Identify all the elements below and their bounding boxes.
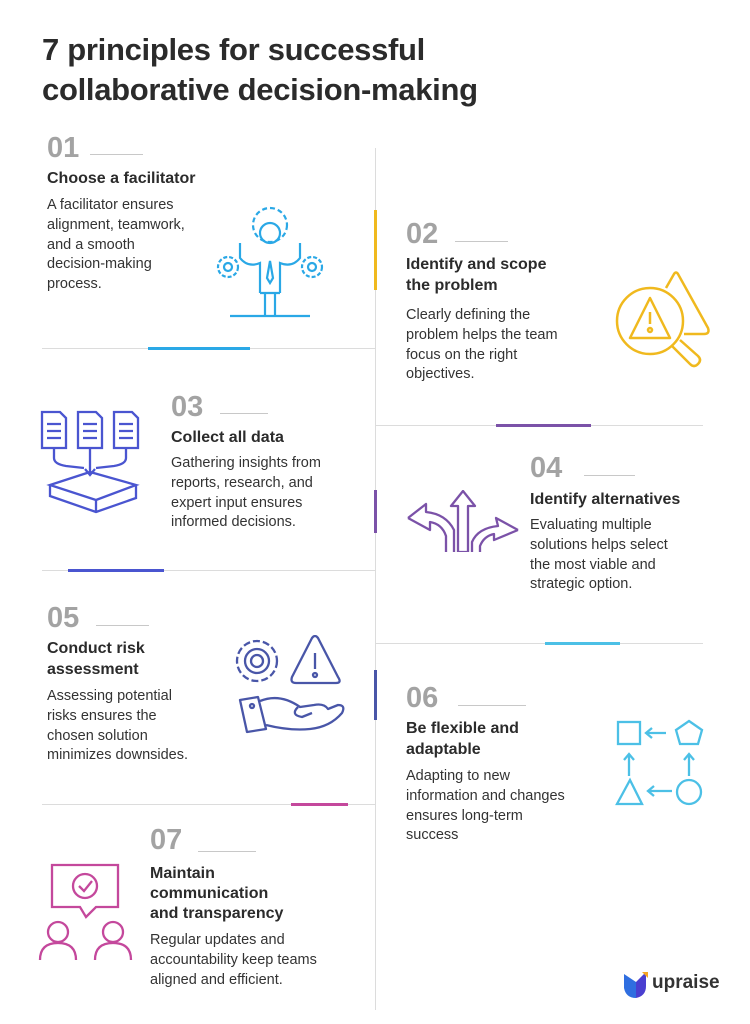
body 05: minimizes downsides. [47, 747, 188, 763]
body 01: A facilitator ensures [47, 197, 174, 213]
heading 07: Maintain [150, 865, 215, 882]
body 03 [171, 455, 321, 530]
heading 05: Conduct risk [47, 640, 145, 657]
heading 07 [150, 865, 284, 922]
body 06: success [406, 827, 458, 843]
heading 01: Choose a facilitator [47, 170, 195, 187]
panel: 02 [406, 218, 558, 382]
panel: 06 [406, 682, 565, 843]
title: 7 principles for successful [42, 32, 425, 67]
heading 03: Collect all data [171, 429, 284, 446]
body 03: expert input ensures [171, 495, 302, 511]
body 04: strategic option. [530, 576, 632, 592]
body 03: Gathering insights from [171, 455, 321, 471]
panel: 07 [150, 824, 317, 988]
heading 06: Be flexible and [406, 720, 519, 737]
heading 05 [47, 640, 145, 678]
logo: upraise: upraise [652, 972, 720, 993]
body 07: Regular updates and [150, 932, 285, 948]
body 04: solutions helps select [530, 537, 668, 553]
body 01: and a smooth [47, 237, 135, 253]
number 01: 01 [47, 132, 79, 164]
number 04: 04 [530, 452, 562, 484]
body 07: aligned and efficient. [150, 972, 283, 988]
body 02: Clearly defining the [406, 307, 530, 323]
body 06: information and changes [406, 788, 565, 804]
body 05: risks ensures the [47, 708, 157, 724]
icon: people with chat check [38, 864, 132, 960]
body 01: process. [47, 276, 102, 292]
icon: warning magnifier [616, 271, 710, 368]
heading 05: assessment [47, 661, 139, 678]
body 03: reports, research, and [171, 475, 313, 491]
icon: documents to box [40, 410, 140, 514]
body 04: Evaluating multiple [530, 517, 652, 533]
number 06: 06 [406, 682, 438, 714]
heading 06: adaptable [406, 741, 481, 758]
body 07: accountability keep teams [150, 952, 317, 968]
body 01 [47, 197, 185, 292]
icon: shapes cycle [615, 720, 704, 806]
icon: facilitator with gears [216, 206, 324, 318]
number 07: 07 [150, 824, 182, 856]
number 05: 05 [47, 602, 79, 634]
body 02: objectives. [406, 366, 475, 382]
body 05: chosen solution [47, 728, 148, 744]
heading 06 [406, 720, 519, 758]
number 02: 02 [406, 218, 438, 250]
panel: 04 [530, 452, 680, 592]
panel: 01 [47, 132, 196, 292]
body 04: the most viable and [530, 557, 656, 573]
icon: diverging arrows [407, 490, 518, 552]
body 01: decision-making [47, 256, 152, 272]
body 06 [406, 768, 565, 843]
heading 02: Identify and scope [406, 256, 546, 273]
body 06: Adapting to new [406, 768, 510, 784]
body 07 [150, 932, 317, 988]
title: collaborative decision-making [42, 72, 478, 107]
icon: risk gear warning hand [236, 635, 344, 734]
number 03: 03 [171, 391, 203, 423]
heading 07: communication [150, 885, 268, 902]
body 06: ensures long-term [406, 808, 523, 824]
panel: 03 [171, 391, 321, 530]
panel: 05 [47, 602, 188, 763]
body 05 [47, 688, 188, 763]
logo: upraise [624, 972, 720, 998]
title [42, 32, 478, 107]
body 04 [530, 517, 668, 592]
body 02: focus on the right [406, 347, 517, 363]
body 05: Assessing potential [47, 688, 172, 704]
heading 02: the problem [406, 277, 498, 294]
body 03: informed decisions. [171, 514, 296, 530]
heading 07: and transparency [150, 905, 283, 922]
heading 04: Identify alternatives [530, 491, 680, 508]
body 02: problem helps the team [406, 327, 558, 343]
body 01: alignment, teamwork, [47, 217, 185, 233]
heading 02 [406, 256, 546, 294]
body 02 [406, 307, 558, 382]
